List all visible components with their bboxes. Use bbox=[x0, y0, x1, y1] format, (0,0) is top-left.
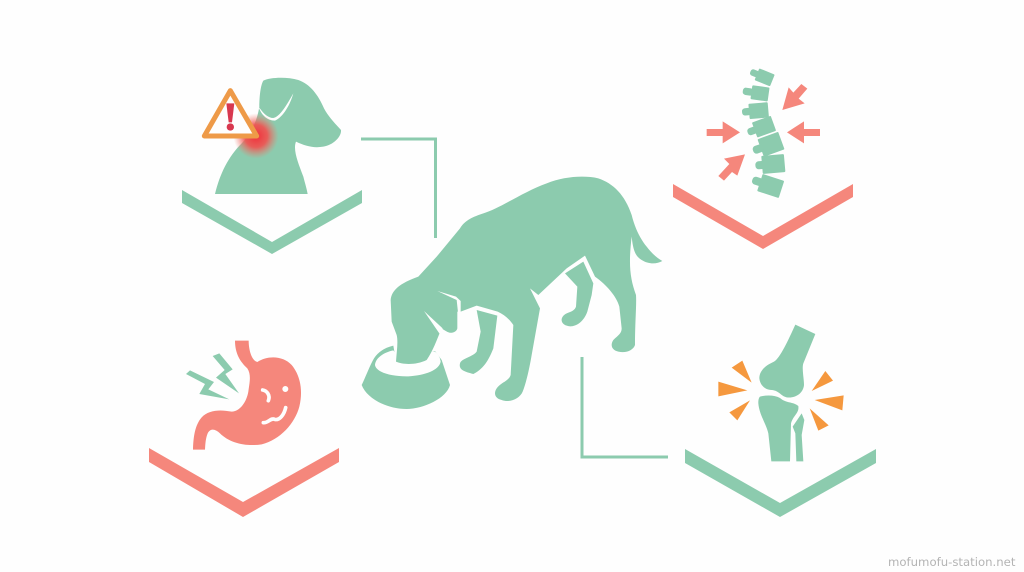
icon: spine with arrows bbox=[707, 66, 820, 198]
warning triangle bbox=[204, 91, 257, 136]
vertebrae bbox=[741, 66, 785, 198]
dog bust silhouette bbox=[215, 78, 341, 194]
inflamed glow bbox=[233, 113, 279, 159]
ear outline cut bbox=[437, 291, 461, 312]
chevron: bottom right bbox=[685, 449, 876, 517]
icon: stomach with pain bolts bbox=[186, 341, 301, 450]
chevron: bottom left bbox=[149, 448, 339, 517]
connector: top left bbox=[361, 139, 436, 238]
icon: dog with sore neck and warning bbox=[204, 78, 341, 194]
food bowl bbox=[362, 346, 450, 409]
watermark: mofumofu-station.net bbox=[888, 555, 1016, 569]
connector: bottom right bbox=[582, 357, 668, 457]
impact marks bbox=[718, 361, 844, 431]
chevron: top right bbox=[673, 184, 853, 249]
ear cut bbox=[258, 93, 293, 121]
femur bbox=[759, 325, 815, 398]
pain bolts bbox=[186, 353, 239, 399]
tibia bbox=[758, 396, 798, 461]
stomach bbox=[193, 341, 301, 450]
ear slit cut bbox=[424, 311, 443, 334]
chevron: top left bbox=[182, 190, 362, 254]
stomach face bbox=[263, 387, 287, 423]
compression arrows bbox=[707, 84, 820, 181]
far rear leg bbox=[562, 262, 593, 326]
dog body silhouette bbox=[391, 177, 662, 401]
far front leg bbox=[460, 310, 497, 374]
fibula bbox=[793, 413, 804, 461]
central dog eating from bowl bbox=[362, 177, 662, 409]
icon: knee joint with impact marks bbox=[718, 325, 844, 461]
